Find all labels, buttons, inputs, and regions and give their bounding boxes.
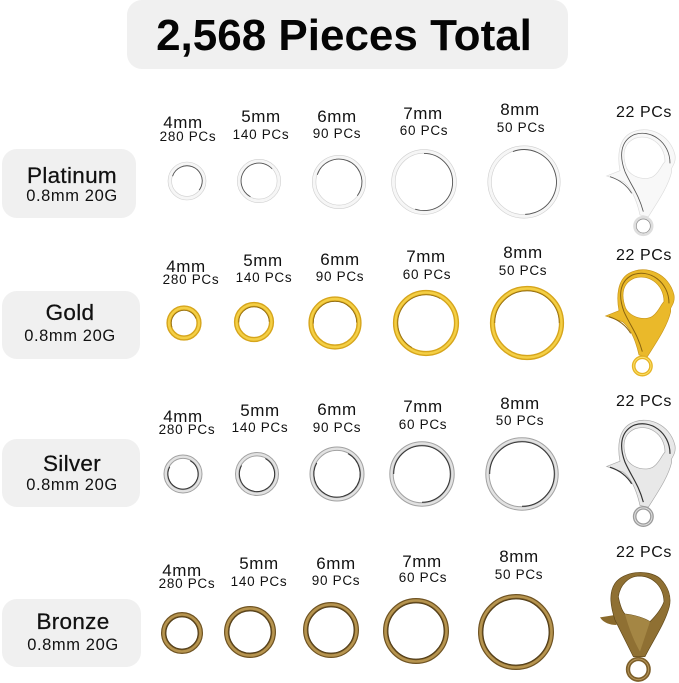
size labels: bronze: 6mm bbox=[316, 554, 356, 573]
size labels: platinum: 8mm bbox=[500, 100, 540, 119]
size labels: platinum: 90 PCs bbox=[313, 126, 361, 141]
size labels: gold: 140 PCs bbox=[236, 270, 292, 285]
rings: gold bbox=[168, 284, 562, 362]
size labels: silver: 280 PCs bbox=[159, 422, 215, 437]
label: bronze bbox=[2, 599, 141, 667]
size labels: gold: 50 PCs bbox=[499, 263, 547, 278]
label: gold bbox=[2, 291, 140, 359]
label: silver: 0.8mm 20G bbox=[26, 476, 118, 494]
size labels: platinum: 22 PCs bbox=[616, 104, 672, 121]
size labels: bronze: 8mm bbox=[499, 547, 539, 566]
label: bronze: Bronze bbox=[36, 609, 110, 634]
size labels: platinum: 6mm bbox=[317, 107, 357, 126]
size labels: gold: 60 PCs bbox=[403, 267, 451, 282]
size labels: silver: 140 PCs bbox=[232, 420, 288, 435]
size labels: platinum: 140 PCs bbox=[233, 127, 289, 142]
size labels: silver: 8mm bbox=[500, 394, 540, 413]
size labels: gold: 5mm bbox=[243, 251, 283, 270]
size labels: platinum: 60 PCs bbox=[400, 123, 448, 138]
size labels: bronze: 140 PCs bbox=[231, 574, 287, 589]
rings: bronze bbox=[164, 596, 552, 668]
label: platinum: 0.8mm 20G bbox=[26, 187, 118, 205]
size labels: silver: 5mm bbox=[240, 401, 280, 420]
size labels: silver: 50 PCs bbox=[496, 413, 544, 428]
size labels: silver: 22 PCs bbox=[616, 393, 672, 410]
size labels: bronze: 7mm bbox=[402, 552, 442, 571]
size labels: bronze: 280 PCs bbox=[159, 576, 215, 591]
label: platinum: Platinum bbox=[27, 163, 117, 188]
size labels: gold: 7mm bbox=[406, 247, 446, 266]
icon: silver clasp bbox=[607, 420, 675, 525]
icon: bronze clasp bbox=[600, 572, 670, 680]
size labels: gold: 280 PCs bbox=[163, 272, 219, 287]
size labels: bronze: 50 PCs bbox=[495, 567, 543, 582]
label: gold: Gold bbox=[46, 300, 94, 325]
icon: gold clasp bbox=[606, 270, 674, 375]
size labels: platinum: 280 PCs bbox=[160, 129, 216, 144]
panel: silver row bbox=[2, 393, 675, 525]
size labels: gold: 4mm bbox=[166, 257, 206, 276]
size labels: gold bbox=[163, 243, 672, 287]
size labels: silver: 4mm bbox=[163, 407, 203, 426]
size labels: gold: 6mm bbox=[320, 250, 360, 269]
size labels: silver bbox=[159, 393, 672, 437]
label: gold: 0.8mm 20G bbox=[24, 327, 116, 345]
size labels: silver: 60 PCs bbox=[399, 417, 447, 432]
label: silver: Silver bbox=[43, 451, 101, 476]
size labels: bronze: 90 PCs bbox=[312, 573, 360, 588]
label: silver bbox=[2, 439, 140, 507]
size labels: gold: 22 PCs bbox=[616, 247, 672, 264]
size labels: bronze: 22 PCs bbox=[616, 544, 672, 561]
panel: bronze row bbox=[2, 544, 672, 680]
size labels: bronze: 60 PCs bbox=[399, 570, 447, 585]
size labels: gold: 8mm bbox=[503, 243, 543, 262]
size labels: silver: 6mm bbox=[317, 400, 357, 419]
size labels: silver: 90 PCs bbox=[313, 420, 361, 435]
size labels: silver: 7mm bbox=[403, 397, 443, 416]
label: bronze: 0.8mm 20G bbox=[27, 636, 119, 654]
panel: gold row bbox=[2, 243, 674, 375]
size labels: bronze: 4mm bbox=[162, 561, 202, 580]
size labels: gold: 90 PCs bbox=[316, 269, 364, 284]
size labels: platinum: 5mm bbox=[241, 107, 281, 126]
size labels: bronze: 5mm bbox=[239, 554, 279, 573]
size labels: platinum bbox=[160, 100, 672, 144]
rings: platinum bbox=[168, 140, 566, 224]
size labels: bronze bbox=[159, 544, 672, 591]
rings: silver bbox=[162, 440, 557, 508]
panel: platinum row bbox=[2, 100, 675, 235]
icon: platinum clasp bbox=[607, 130, 675, 235]
label: platinum bbox=[2, 149, 136, 218]
title: 2,568 Pieces Total bbox=[156, 11, 532, 60]
size labels: platinum: 7mm bbox=[403, 104, 443, 123]
size labels: platinum: 4mm bbox=[163, 113, 203, 132]
title bbox=[127, 0, 568, 69]
size labels: platinum: 50 PCs bbox=[497, 120, 545, 135]
